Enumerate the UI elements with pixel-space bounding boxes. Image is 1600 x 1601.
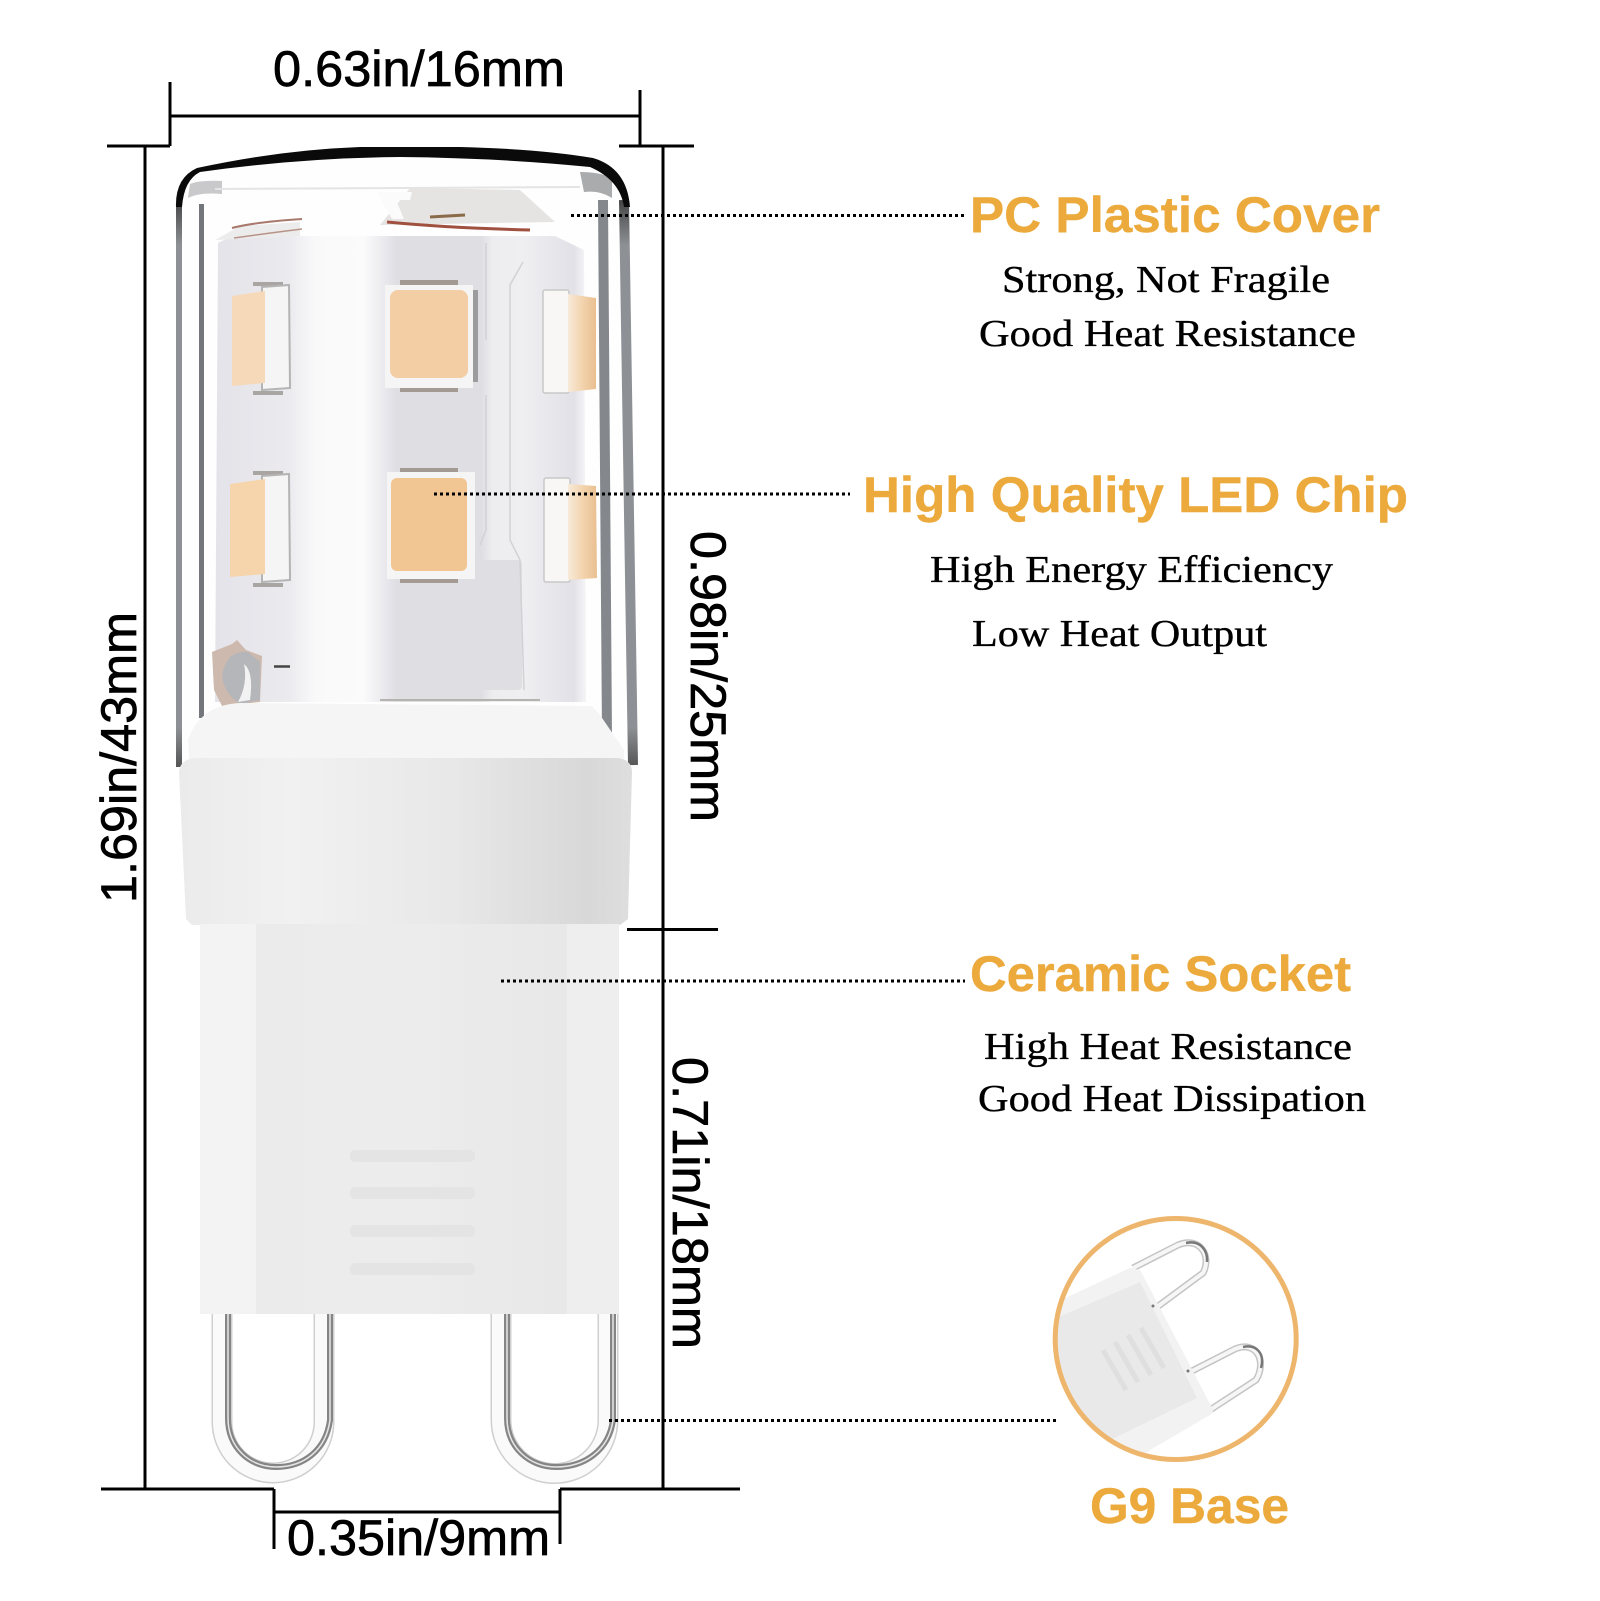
glass cover (176, 147, 638, 767)
dimension: cover height: 0.98in/25mm (680, 531, 736, 822)
infographic: G9 LED bulb anatomy (99, 49, 1406, 1556)
inset pin: upper (1133, 1242, 1207, 1307)
inset ring (1055, 1218, 1296, 1460)
LED chips (230, 280, 597, 587)
solder joint (212, 640, 290, 706)
LED chip: right bottom (544, 478, 597, 582)
copper traces and top parts (215, 188, 555, 240)
LED chip: center bottom (387, 468, 475, 583)
pin: left (222, 1313, 330, 1473)
description line 1: High Heat Resistance (984, 1026, 1352, 1068)
dimension: socket height: 0.71in/18mm (662, 1057, 718, 1349)
ceramic socket (200, 924, 619, 1314)
inset pin: lower (1190, 1346, 1262, 1410)
callout: LED chip (863, 467, 1408, 655)
dimension lines (101, 82, 740, 1549)
inset socket and pins (1040, 1242, 1262, 1460)
pin: right (501, 1313, 613, 1474)
heading: High Quality LED Chip (863, 467, 1408, 523)
callout: PC plastic cover (970, 187, 1380, 355)
callout line: cover (571, 214, 964, 217)
callout line: base (609, 1419, 1059, 1422)
LED chip: left top (232, 282, 290, 395)
description line 1: High Energy Efficiency (930, 549, 1334, 591)
white collar (179, 703, 632, 925)
heading: PC Plastic Cover (970, 187, 1380, 243)
LED chip: left bottom (230, 471, 290, 587)
description line 2: Good Heat Dissipation (978, 1078, 1366, 1120)
heading: Ceramic Socket (970, 946, 1351, 1002)
inset: G9 base detail (1040, 1218, 1296, 1460)
LED circuit board (215, 236, 586, 702)
LED chip: right top (543, 290, 596, 393)
dimension: overall height: 1.69in/43mm (91, 612, 147, 903)
callout line: socket (501, 980, 965, 982)
dimension: pin spacing: 0.35in/9mm (287, 1510, 550, 1566)
description line 2: Good Heat Resistance (979, 313, 1356, 355)
callout line: LED chip (434, 492, 850, 496)
description line 1: Strong, Not Fragile (1002, 259, 1330, 301)
description line 2: Low Heat Output (972, 613, 1267, 655)
inset caption: G9 Base (1090, 1478, 1289, 1534)
LED chip: center top (385, 280, 478, 392)
dimension: top width: 0.63in/16mm (273, 41, 565, 97)
callout: ceramic socket (970, 946, 1366, 1120)
product photo: G9 bulb (176, 147, 638, 1474)
